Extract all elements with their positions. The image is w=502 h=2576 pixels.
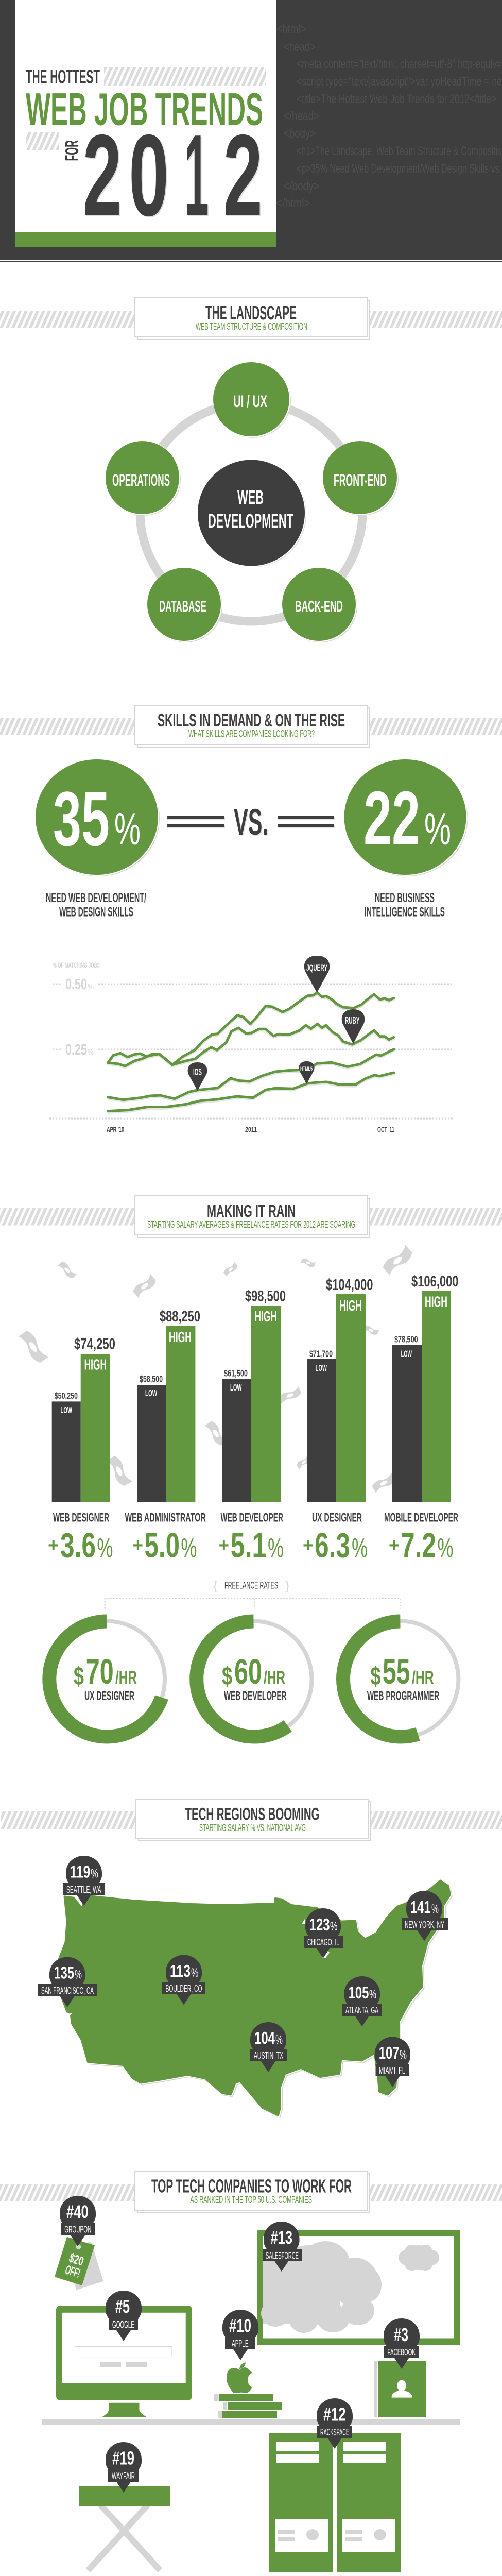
- city pin: austin: %: [275, 2033, 283, 2047]
- city pin: new york: [402, 1891, 448, 1941]
- bar: web administrator: LOW: [145, 1388, 157, 1398]
- line chart: matching jobs: 0.50: [65, 976, 87, 993]
- code text background: <head>: [284, 40, 316, 54]
- title: 2012: [82, 110, 264, 241]
- heading: the landscape: THE LANDSCAPE: [205, 302, 297, 324]
- stat: 35 percent: NEED WEB DEVELOPMENT/: [46, 891, 146, 905]
- role: front-end: FRONT-END: [334, 471, 387, 489]
- role: front-end: [323, 441, 399, 516]
- shelf: [42, 2419, 460, 2425]
- bar: web designer: $74,250: [74, 1335, 115, 1352]
- rate ring: web developer: [196, 1621, 312, 1737]
- bar: web designer: %: [97, 1533, 113, 1563]
- bar: mobile developer: HIGH: [425, 1294, 447, 1311]
- city pin: boulder: %: [191, 1966, 199, 1980]
- city pin: boulder: [162, 1955, 205, 2005]
- stat: 35 percent: 35: [53, 775, 110, 862]
- city pin: san francisco: SAN FRANCISCO, CA: [41, 1986, 94, 1996]
- role: back-end: BACK-END: [295, 597, 343, 615]
- bar: web designer: 3.6: [60, 1526, 96, 1565]
- company: wayfair table: #19: [112, 2448, 134, 2469]
- company: salesforce frame and clouds: #13: [271, 2228, 292, 2248]
- company: google monitor: GOOGLE: [112, 2319, 134, 2330]
- title: 2012: 0: [130, 111, 170, 241]
- bar: web administrator: $58,500: [140, 1374, 163, 1384]
- rate ring: web programmer: 55: [383, 1652, 410, 1691]
- city pin: new york: NEW YORK, NY: [405, 1920, 444, 1930]
- bar: web developer: [219, 1288, 286, 1565]
- bar: web administrator: HIGH: [169, 1329, 192, 1346]
- rate ring: web developer: 60: [234, 1652, 262, 1691]
- heading: the landscape: WEB TEAM STRUCTURE & COMPOSITION: [196, 321, 307, 332]
- company: rackspace servers: [269, 2398, 401, 2572]
- pin: html5: [299, 1061, 315, 1084]
- company: apple and books: #10: [229, 2315, 251, 2336]
- company: salesforce frame and clouds: SALESFORCE: [266, 2251, 299, 2261]
- city pin: miami: [375, 2037, 410, 2087]
- role: operations: [106, 441, 181, 516]
- city pin: seattle: %: [91, 1867, 98, 1881]
- heading: skills in demand: [0, 705, 502, 747]
- company: facebook book: [374, 2318, 426, 2417]
- code text background: [276, 22, 502, 210]
- company: facebook book: FACEBOOK: [387, 2347, 416, 2358]
- company: groupon tag: $20: [67, 2251, 85, 2269]
- city pin: seattle: SEATTLE, WA: [66, 1885, 101, 1895]
- heading: the landscape: [0, 298, 502, 340]
- big cloud: [261, 2241, 382, 2333]
- stat: 22 percent: 22: [363, 776, 420, 861]
- bar: web developer: WEB DEVELOPER: [220, 1511, 283, 1525]
- city pin: chicago: %: [330, 1920, 338, 1934]
- bar: web administrator: $88,250: [160, 1308, 200, 1325]
- stat: 35 percent: [36, 759, 160, 919]
- city pin: miami: %: [400, 2048, 407, 2062]
- city pin: austin: [250, 2022, 287, 2072]
- rate ring: ux designer: /HR: [115, 1668, 137, 1688]
- bar: web developer: $98,500: [245, 1288, 286, 1304]
- trend lines: [108, 993, 394, 1113]
- company: rackspace servers: #12: [323, 2404, 346, 2425]
- role: ui / ux: UI / UX: [233, 392, 267, 411]
- freelance rates heading: [105, 1579, 400, 1608]
- title: the hottest: THE HOTTEST: [26, 66, 100, 87]
- versus divider: VS.: [234, 802, 268, 843]
- bar: web administrator: WEB ADMINISTRATOR: [125, 1511, 206, 1525]
- company: facebook book: #3: [394, 2324, 408, 2345]
- bar: web designer: WEB DESIGNER: [53, 1511, 109, 1525]
- bar: web designer: HIGH: [84, 1357, 107, 1374]
- role: back-end: [282, 568, 357, 642]
- city pin: miami: 107: [379, 2043, 400, 2062]
- bar: ux designer: $104,000: [326, 1277, 373, 1294]
- bar: ux designer: [303, 1277, 373, 1565]
- city pin: san francisco: 135: [54, 1963, 74, 1982]
- bar: ux designer: +: [303, 1535, 314, 1556]
- rate ring: web developer: /HR: [264, 1668, 285, 1688]
- small cloud: [399, 2245, 439, 2271]
- heading: top tech companies: AS RANKED IN THE TOP 50 U.S. COMPANIES: [190, 2195, 312, 2206]
- bar: web developer: $61,500: [224, 1368, 248, 1378]
- bar: ux designer: HIGH: [339, 1298, 362, 1314]
- role: web development: DEVELOPMENT: [208, 511, 293, 532]
- city pin: san francisco: [38, 1957, 97, 2007]
- falling money: [18, 1245, 414, 1494]
- heading: making it rain: MAKING IT RAIN: [207, 1201, 296, 1221]
- bar: mobile developer: +: [389, 1535, 400, 1556]
- bar: web administrator: [125, 1308, 206, 1565]
- bar: web administrator: 5.0: [144, 1526, 180, 1565]
- company: google monitor: [56, 2291, 192, 2417]
- rate ring: web programmer: /HR: [412, 1668, 434, 1688]
- line chart: matching jobs: % OF MATCHING JOBS: [53, 961, 100, 969]
- city pin: austin: 104: [254, 2028, 275, 2047]
- title: web job trends: WEB JOB TRENDS: [26, 83, 263, 134]
- city pin: seattle: 119: [70, 1862, 90, 1882]
- heading: skills in demand: WHAT SKILLS ARE COMPANIES LOOKING FOR?: [188, 728, 315, 740]
- bar: web developer: %: [268, 1533, 284, 1563]
- role: ui / ux: [213, 362, 291, 438]
- company: groupon tag: OFF!: [63, 2263, 82, 2281]
- role: web development: [198, 460, 306, 567]
- bar: mobile developer: $78,500: [394, 1334, 418, 1345]
- title: 2012: 1: [185, 111, 210, 241]
- stat: 22 percent: [344, 759, 468, 919]
- title: for: FOR: [61, 140, 82, 161]
- city pin: atlanta: %: [369, 1988, 376, 2002]
- line chart: matching jobs: [49, 956, 454, 1133]
- company: groupon tag: [55, 2196, 103, 2290]
- bar: web developer: LOW: [230, 1382, 242, 1393]
- title: 2012: 1: [184, 110, 209, 240]
- rate ring: ux designer: $: [74, 1662, 84, 1690]
- rate ring: web programmer: $: [371, 1662, 381, 1690]
- pin: ios: IOS: [193, 1067, 202, 1077]
- company: apple and books: [214, 2310, 282, 2418]
- section: making it rain: [0, 1196, 502, 1737]
- heading: tech regions: STARTING SALARY % VS. NATIONAL AVG: [199, 1823, 306, 1834]
- freelance rates heading: }: [285, 1579, 289, 1593]
- heading: tech regions: TECH REGIONS BOOMING: [185, 1805, 319, 1824]
- code text background: <html>: [276, 22, 306, 36]
- title: 2012: 0: [129, 110, 169, 240]
- versus divider: VS.: [235, 803, 269, 844]
- section: top tech companies: [0, 2171, 502, 2572]
- bar: web administrator: +: [133, 1535, 143, 1556]
- company: groupon tag: GROUPON: [64, 2225, 91, 2235]
- city pin: atlanta: 105: [349, 1983, 369, 2002]
- city pin: san francisco: %: [75, 1968, 82, 1981]
- bar: web designer: LOW: [61, 1405, 72, 1415]
- pin: ruby: RUBY: [345, 1015, 359, 1026]
- rate ring: ux designer: [48, 1621, 165, 1737]
- city pin: chicago: CHICAGO, IL: [307, 1937, 339, 1947]
- city pin: atlanta: ATLANTA, GA: [345, 2005, 378, 2015]
- freelance rates heading: {: [213, 1579, 217, 1593]
- pin: jquery: [304, 956, 330, 993]
- rate ring: web programmer: WEB PROGRAMMER: [367, 1689, 439, 1703]
- company: groupon tag: #40: [66, 2202, 89, 2222]
- bar: mobile developer: %: [438, 1533, 454, 1563]
- heading: making it rain: [0, 1196, 502, 1238]
- heading: skills in demand: SKILLS IN DEMAND & ON THE RISE: [158, 710, 345, 731]
- pin: html5: HTML5: [300, 1066, 313, 1072]
- bar: web administrator: %: [181, 1533, 197, 1563]
- versus divider: [167, 802, 335, 844]
- city pin: chicago: [304, 1908, 343, 1958]
- stat: 35 percent: %: [114, 803, 141, 854]
- bar: mobile developer: 7.2: [401, 1526, 436, 1565]
- company: salesforce frame and clouds: [260, 2222, 457, 2342]
- line chart: matching jobs: 2011: [245, 1125, 257, 1133]
- bar: mobile developer: LOW: [401, 1349, 412, 1359]
- rate ring: ux designer: UX DESIGNER: [84, 1689, 134, 1703]
- bar: mobile developer: [384, 1273, 458, 1565]
- city pin: new york: 141: [410, 1897, 430, 1917]
- title: 2012: 2: [224, 111, 264, 241]
- code text background: </html>: [276, 196, 310, 210]
- role: database: DATABASE: [159, 597, 206, 615]
- bar: ux designer: LOW: [316, 1363, 327, 1373]
- line chart: matching jobs: 0.25: [65, 1042, 87, 1058]
- rate ring: web programmer: [342, 1621, 458, 1737]
- city pin: boulder: 113: [170, 1961, 191, 1980]
- city pin: seattle: [63, 1856, 105, 1906]
- bar: ux designer: $71,700: [309, 1349, 333, 1359]
- pin: ios: [188, 1062, 207, 1091]
- rate ring: ux designer: 70: [86, 1652, 114, 1691]
- section: tech regions booming: [1, 1799, 502, 2117]
- company: wayfair table: [79, 2442, 170, 2570]
- bar: web designer: [48, 1335, 115, 1565]
- bar: web developer: +: [219, 1535, 229, 1556]
- bar: ux designer: 6.3: [315, 1526, 350, 1565]
- header banner: [0, 0, 502, 262]
- ring connecting roles: [140, 403, 362, 621]
- code text background: <body>: [284, 127, 316, 141]
- title panel: [15, 0, 276, 247]
- stat: 22 percent: NEED BUSINESS: [375, 891, 435, 905]
- code text background: </body>: [284, 179, 319, 193]
- freelance rates heading: FREELANCE RATES: [224, 1581, 278, 1591]
- company: google monitor: #5: [115, 2296, 130, 2317]
- city pin: boulder: BOULDER, CO: [166, 1984, 202, 1994]
- city pin: chicago: 123: [309, 1915, 330, 1934]
- stat: 35 percent: WEB DESIGN SKILLS: [59, 905, 133, 919]
- bar: web designer: +: [48, 1535, 59, 1556]
- city pin: austin: AUSTIN, TX: [254, 2050, 283, 2061]
- us map: [58, 1880, 452, 2117]
- city pin: new york: %: [431, 1902, 439, 1916]
- line chart: matching jobs: %: [88, 982, 94, 991]
- line chart: matching jobs: %: [88, 1048, 94, 1057]
- company: wayfair table: WAYFAIR: [112, 2471, 135, 2481]
- title: 2012: 2: [82, 110, 122, 240]
- city pin: atlanta: [342, 1976, 382, 2027]
- role: operations: OPERATIONS: [112, 471, 170, 489]
- rate ring: web developer: WEB DEVELOPER: [224, 1689, 287, 1703]
- bar: ux designer: %: [352, 1533, 368, 1563]
- heading: tech regions: [1, 1799, 502, 1841]
- role: web development: WEB: [237, 487, 264, 509]
- pin: jquery: JQUERY: [306, 963, 327, 973]
- bar: web designer: $50,250: [55, 1391, 78, 1401]
- title: 2012: 2: [223, 110, 263, 240]
- section: the landscape: [0, 298, 502, 642]
- heading: top tech companies: [0, 2171, 502, 2213]
- pin: ruby: [342, 1009, 365, 1044]
- bar: web developer: 5.1: [231, 1526, 266, 1565]
- code text background: </head>: [284, 109, 319, 123]
- role: database: [147, 568, 222, 642]
- heading: top tech companies: TOP TECH COMPANIES TO WORK FOR: [151, 2175, 352, 2197]
- line chart: matching jobs: OCT '11: [377, 1125, 394, 1133]
- bar: mobile developer: $106,000: [411, 1273, 458, 1290]
- title: 2012: 2: [83, 111, 123, 241]
- city pin: miami: MIAMI, FL: [379, 2065, 405, 2076]
- bar: ux designer: UX DESIGNER: [312, 1511, 362, 1525]
- stat: 22 percent: %: [424, 803, 451, 854]
- bar: web developer: HIGH: [254, 1309, 277, 1325]
- line chart: matching jobs: APR '10: [107, 1125, 124, 1133]
- rate ring: web developer: $: [222, 1662, 232, 1690]
- company: rackspace servers: RACKSPACE: [320, 2427, 349, 2437]
- company: apple and books: APPLE: [232, 2338, 249, 2349]
- section: skills in demand: [0, 705, 502, 1133]
